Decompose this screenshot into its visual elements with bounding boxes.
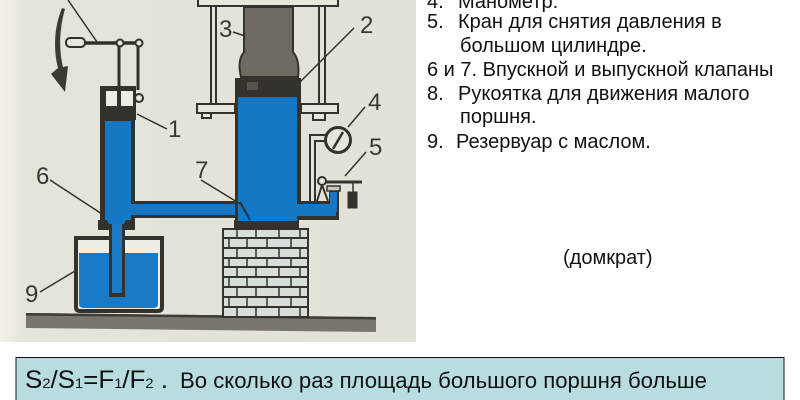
parts list: Рукоятка для движения малого [458,83,749,105]
explanation text: Во сколько раз площадь большого поршня больше [180,368,707,393]
part numbers on diagram: 7 [195,157,208,184]
manometer 4 and relief valve 5 [310,128,362,208]
large cylinder 2 [234,78,339,230]
compressed object 3 [240,7,298,77]
parts list: Кран для снятия давления в [458,11,722,33]
parts list: 8. [427,83,444,105]
part numbers on diagram: 2 [360,12,373,39]
brick support [223,229,308,317]
oil reservoir 9 [76,224,162,311]
panel: diagram background [0,0,416,342]
small piston handle 8 [66,0,143,102]
parts list: 6 и 7. Впускной и выпускной клапаны [427,59,773,81]
part numbers on diagram: 4 [368,89,381,116]
press frame [197,0,338,120]
arrow: handle direction [51,8,68,92]
caption: jack: (домкрат) [563,247,653,269]
small cylinder 1 [98,86,240,230]
formula box [16,358,784,400]
parts list: большом цилиндре. [460,35,647,57]
part numbers on diagram [25,12,382,308]
part numbers on diagram: 5 [369,134,382,161]
ground base [26,313,376,332]
parts list: 9. [427,131,444,153]
parts list [427,0,773,153]
formula: S2/S1=F1/F2 . [25,366,168,394]
part numbers on diagram: 3 [219,16,232,43]
part numbers on diagram: 1 [168,116,181,143]
leader lines [40,28,366,292]
parts list: 5. [427,11,444,33]
part numbers on diagram: 6 [36,163,49,190]
part numbers on diagram: 9 [25,281,38,308]
parts list: поршня. [460,106,537,128]
parts list: Резервуар с маслом. [456,131,651,153]
